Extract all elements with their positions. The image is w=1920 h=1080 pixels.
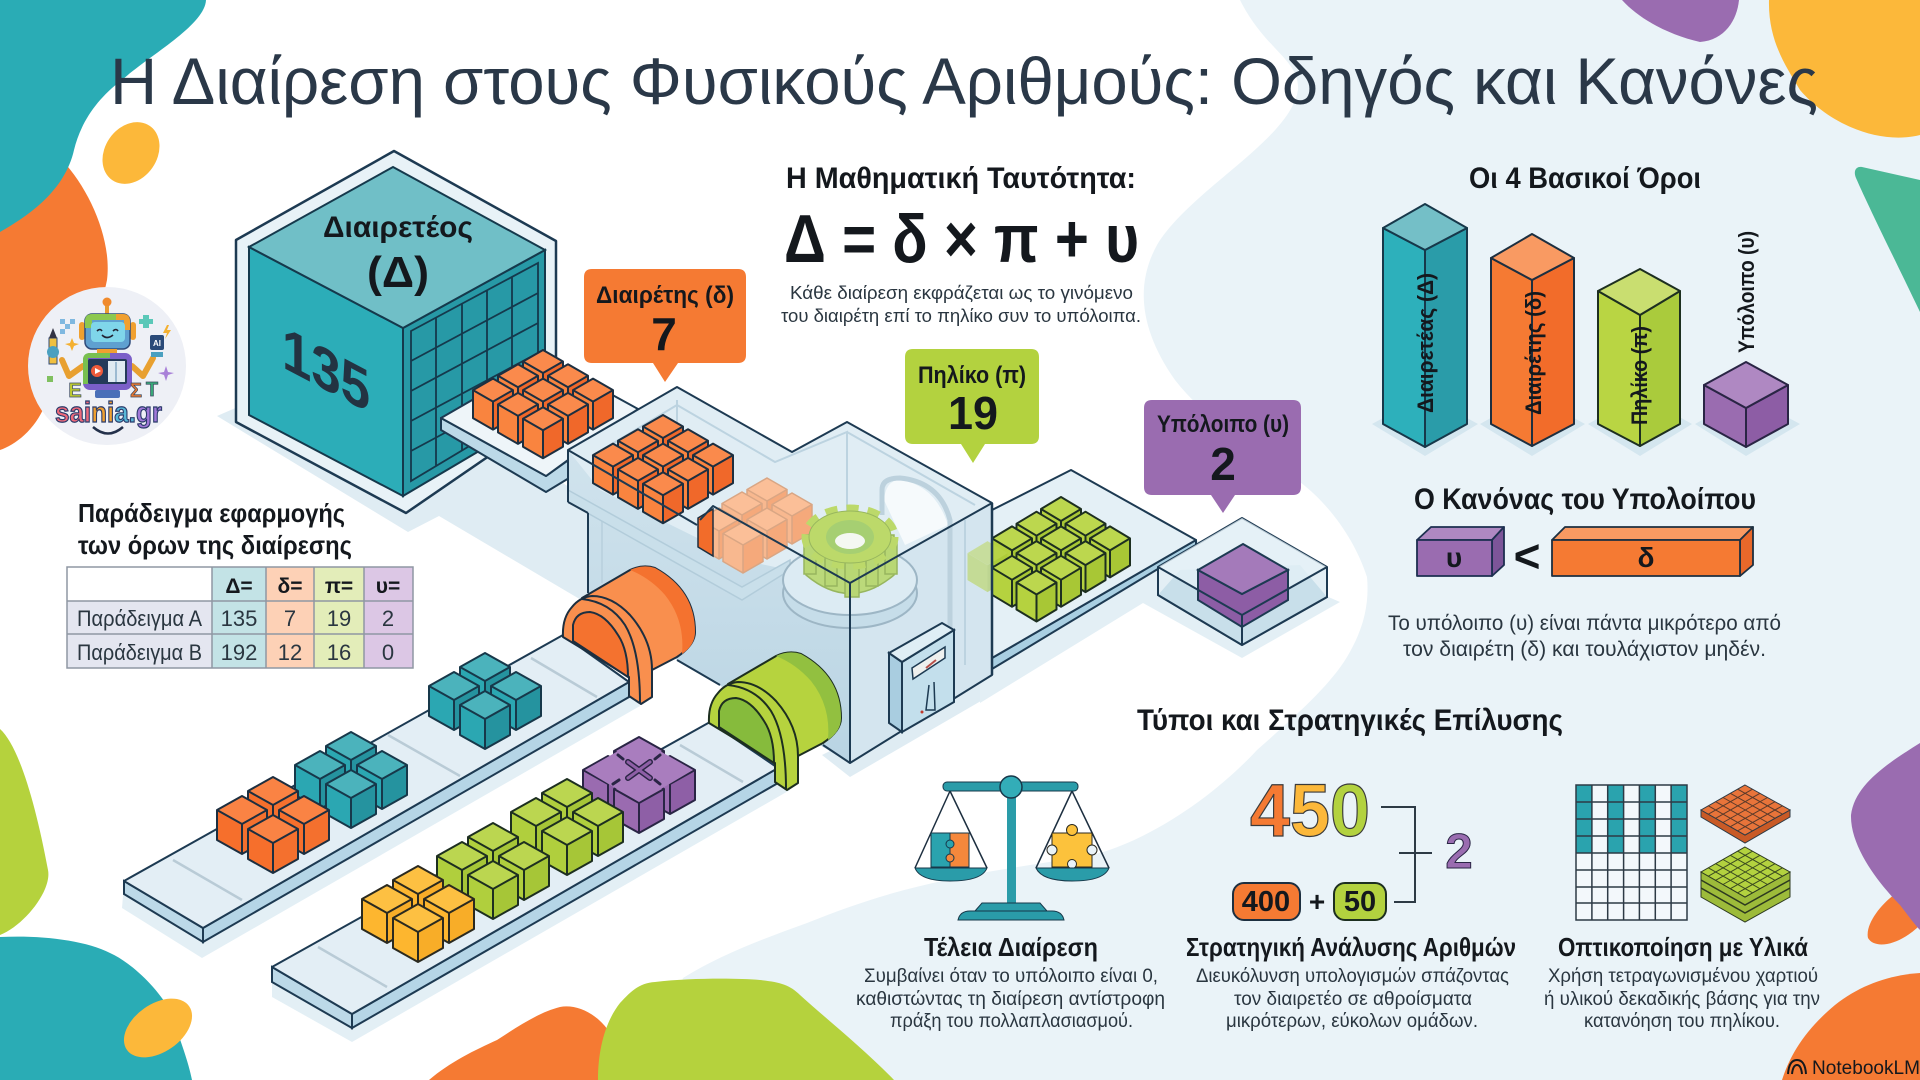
logo: sainia.gr robot badge: Ε [68, 380, 82, 402]
logo: sainia.gr robot badge: Σ [130, 380, 142, 402]
block group: yellow [362, 866, 474, 962]
background blob: orange bottom [429, 1006, 640, 1080]
bar column shadows [1372, 395, 1800, 456]
callout: remainder: Υπόλοιπο (υ) [1157, 411, 1289, 438]
example table: 192 [221, 640, 257, 665]
callout: remainder [1144, 400, 1301, 513]
rule explanation [1388, 612, 1781, 661]
glass inner edges [592, 400, 975, 763]
background blob: green bottom [598, 979, 894, 1080]
block group: teal (top) [429, 653, 541, 749]
example table: δ= [278, 575, 302, 598]
block group: green (upper) [511, 779, 623, 875]
machine inner arch pipe [882, 478, 950, 650]
heading: 4 basic terms: Οι 4 Βασικοί Όροι [1469, 162, 1701, 195]
card: perfect division: Συμβαίνει όταν το υπόλοιπο είναι 0, [864, 966, 1158, 987]
heading: types and strategies: Τύποι και Στρατηγικές Επίλυσης [1137, 704, 1563, 737]
column: divisor: Διαιρέτης (δ) [1521, 291, 1546, 415]
identity heading: Η Μαθηματική Ταυτότητα: [786, 162, 1136, 195]
logo: sainia.gr robot badge: AI [153, 339, 161, 348]
card: number decomposition strategy: Διευκόλυνση υπολογισμών σπάζοντας [1196, 966, 1509, 987]
card: visualization with materials: ή υλικού δεκαδικής βάσης για την [1544, 989, 1820, 1010]
glass machine outlines [568, 387, 992, 763]
platform leaving cube [441, 358, 640, 492]
background blob: yellow bottom-left [113, 987, 203, 1069]
icon: number decomposition 450: 2 [1445, 825, 1473, 879]
remainder glass tray with purple cube [1158, 518, 1327, 645]
background blob: purple top-right [1622, 0, 1739, 42]
example table: 135 [221, 606, 257, 631]
column: quotient: Πηλίκο (π) [1627, 326, 1652, 425]
callout: quotient [905, 349, 1039, 463]
card: number decomposition strategy [1186, 932, 1516, 1032]
card: number decomposition strategy: Στρατηγική Ανάλυσης Αριθμών [1186, 932, 1516, 962]
background blob: yellow top-left [91, 111, 171, 195]
background blob: purple right [1851, 743, 1920, 930]
callout: divisor: Διαιρέτης (δ) [596, 282, 734, 309]
rule: δ block [1552, 527, 1753, 576]
callout: quotient: 19 [948, 387, 998, 439]
example heading [78, 498, 352, 560]
card: perfect division: πράξη του πολλαπλασιασμού. [890, 1011, 1133, 1032]
icon: number decomposition 450: 400 [1242, 886, 1290, 918]
example heading: Παράδειγμα εφαρμογής [78, 498, 345, 528]
background blob: green triangle right [1855, 167, 1920, 312]
card: perfect division: καθιστώντας τη διαίρεση αντίστροφη [856, 989, 1165, 1010]
rule: υ block: υ [1446, 542, 1462, 573]
orange blocks: on platform [473, 350, 613, 458]
example table: υ= [376, 575, 400, 598]
background blob: yellow top-right [1769, 0, 1920, 138]
card: perfect division: Τέλεια Διαίρεση [924, 932, 1098, 962]
title: Η Διαίρεση στους Φυσικούς Αριθμούς: Οδηγός και Κανόνες [110, 44, 1818, 118]
rule: υ block [1417, 527, 1504, 576]
formula explanation: του διαιρέτη επί το πηλίκο συν το υπόλοιπα. [781, 306, 1141, 326]
background blob: small orange right [1868, 895, 1920, 944]
floor shadow under machine [822, 670, 1017, 777]
cube side grid [411, 263, 538, 481]
example table: 12 [278, 640, 302, 665]
example table: π= [325, 575, 353, 598]
background blob: teal bottom-left [0, 937, 192, 1080]
icon: base-ten block [1701, 847, 1790, 922]
column: dividend [1383, 204, 1467, 447]
icon: base-ten flat [1701, 785, 1790, 843]
faded orange blocks [698, 478, 812, 573]
cube number 135: 135 [282, 313, 370, 426]
column: divisor [1491, 234, 1574, 446]
rule: δ block: δ [1638, 542, 1654, 573]
card: perfect division [856, 932, 1165, 1032]
column: dividend: Διαιρετέας (Δ) [1413, 273, 1438, 413]
big cube: dividend: (Δ) [367, 248, 429, 297]
background blob: green left [0, 729, 48, 935]
icon: number decomposition 450: + [1309, 886, 1325, 917]
background blob: orange left [0, 160, 108, 450]
floor shadow under big cube [217, 380, 588, 604]
card: number decomposition strategy: μικρότερων, εύκολων ομάδων. [1226, 1011, 1478, 1032]
icon: grid paper [1576, 785, 1687, 920]
right pan with puzzle [1036, 824, 1109, 881]
formula explanation [781, 283, 1141, 326]
rule explanation: τον διαιρέτη (δ) και τουλάχιστον μηδέν. [1403, 638, 1766, 661]
callout: divisor: 7 [651, 308, 677, 360]
big cube: dividend [236, 151, 556, 513]
logo: sainia.gr robot badge: sainia.gr [55, 397, 162, 429]
orange tunnel [563, 566, 695, 704]
example table: Παράδειγμα Β [77, 640, 202, 665]
gear [804, 509, 897, 597]
block group: orange [217, 777, 329, 873]
example table: 19 [327, 606, 351, 631]
watermark: NotebookLM: NotebookLM [1812, 1058, 1920, 1079]
example table: 16 [327, 640, 351, 665]
column: remainder [1704, 231, 1788, 447]
machine right edge overlay [991, 503, 993, 675]
logo: sainia.gr robot badge [28, 287, 186, 445]
formula: Δ = δ × π + υ [784, 201, 1139, 277]
green blocks: on exit platform [968, 497, 1130, 622]
example table: Δ= [225, 575, 253, 598]
block group: purple with notched top [583, 737, 695, 833]
column: remainder: Υπόλοιπο (υ) [1734, 231, 1759, 353]
example table [67, 567, 413, 668]
card: number decomposition strategy: τον διαιρετέο σε αθροίσματα [1234, 989, 1472, 1010]
background blob: orange bottom-right [1782, 973, 1920, 1080]
tray band [568, 490, 790, 600]
green tunnel [709, 652, 841, 790]
callout: remainder: 2 [1210, 438, 1236, 490]
block group: green (lower) [437, 823, 549, 919]
cube label Διαιρετέος (Δ): Διαιρετέος [323, 211, 473, 244]
conveyor belt: lower [272, 722, 778, 1028]
icon: number decomposition 450 [1233, 769, 1473, 920]
icon: number decomposition 450: 50 [1344, 886, 1376, 918]
card: visualization with materials: κατανόηση του πηλίκου. [1584, 1011, 1780, 1032]
example heading: των όρων της διαίρεσης [78, 530, 352, 560]
exit platform [992, 470, 1196, 669]
gear platform disc [783, 545, 917, 628]
formula explanation: Κάθε διαίρεση εκφράζεται ως το γινόμενο [790, 283, 1133, 303]
example table: 2 [382, 606, 394, 631]
card: visualization with materials: Οπτικοποίηση με Υλικά [1558, 932, 1808, 962]
orange blocks: inside machine [593, 415, 733, 523]
heading: remainder rule: Ο Κανόνας του Υπολοίπου [1414, 483, 1756, 516]
floor shadow under belts [122, 690, 790, 1042]
card: visualization with materials: Χρήση τετραγωνισμένου χαρτιού [1548, 966, 1818, 987]
background: pale blue region [650, 0, 1920, 1080]
icon: number decomposition 450: 450 [1250, 769, 1370, 852]
rule: less-than sign: < [1514, 530, 1540, 582]
background blob: teal top-left [0, 0, 206, 232]
callout: divisor [584, 269, 746, 382]
block group: teal (middle) [295, 732, 407, 828]
conveyor belt: upper [124, 635, 629, 942]
meter panel [889, 623, 954, 732]
left pan with puzzle [915, 833, 987, 881]
example table: Παράδειγμα Α [77, 606, 202, 631]
floor shadow under exit platform and tray [980, 540, 1340, 703]
example table: 7 [284, 606, 296, 631]
example table: 0 [382, 640, 394, 665]
icon: balance scale [915, 776, 1109, 920]
rule explanation: Το υπόλοιπο (υ) είναι πάντα μικρότερο από [1388, 612, 1781, 635]
logo: sainia.gr robot badge: Τ [146, 379, 158, 401]
column: quotient [1598, 269, 1680, 446]
card: visualization with materials [1544, 932, 1820, 1032]
glass machine body [568, 387, 992, 763]
callout: quotient: Πηλίκο (π) [918, 362, 1026, 389]
